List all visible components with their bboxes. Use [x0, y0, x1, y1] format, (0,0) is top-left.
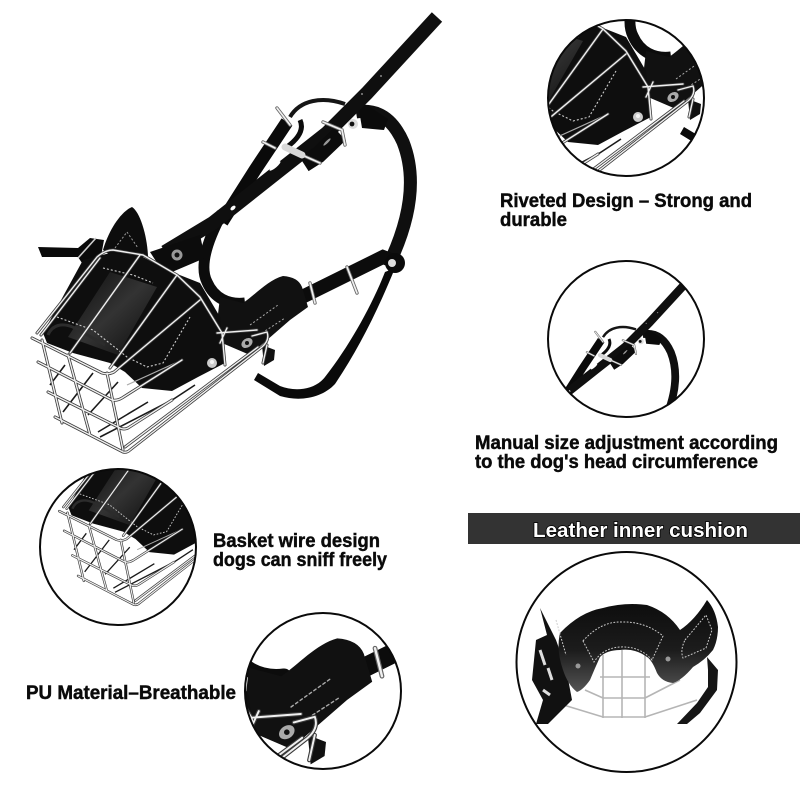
- banner: leather inner cushion: [468, 513, 800, 544]
- cheek piece: [215, 276, 308, 355]
- wire basket: [32, 250, 268, 452]
- strap slits and holes: [230, 75, 382, 211]
- strap rivet: [385, 253, 405, 273]
- muzzle stitching: [57, 268, 190, 367]
- panel: basket wire circle: [39, 468, 197, 626]
- banner: leather inner cushion: Leather inner cushion: [533, 520, 748, 542]
- cheek stitching: [250, 305, 285, 333]
- adjustment ring: [290, 100, 345, 117]
- lower buckle dark edges: [310, 267, 357, 303]
- buckle roller: [285, 147, 302, 155]
- left tail strap: [38, 238, 104, 266]
- strap nub behind hoop: [262, 345, 275, 366]
- text: manual size adjustment: Manual size adjustment according: [475, 433, 778, 454]
- upper buckle dark edges: [263, 108, 345, 163]
- leather nose body: [43, 253, 225, 391]
- text: basket wire design: [213, 531, 387, 571]
- ear flap: [103, 207, 148, 262]
- loop tab: [358, 104, 388, 130]
- text: riveted design: durable: [500, 210, 567, 231]
- panel: riveted detail circle: [547, 19, 705, 177]
- ear stitching: [115, 232, 138, 248]
- top rivet tab: [150, 235, 205, 275]
- nose opening highlight: [48, 325, 105, 345]
- text: manual size adjustment: [475, 433, 778, 473]
- panel: PU material circle: [244, 612, 402, 770]
- thin lower strap: [254, 268, 395, 399]
- panel: leather cushion circle: [516, 552, 736, 772]
- lower buckle metal bars: [310, 267, 357, 303]
- inner strap: [222, 122, 287, 222]
- main top strap: [165, 17, 437, 252]
- back loop strap: [204, 213, 245, 303]
- muzzle upper assembly: [38, 17, 437, 391]
- eyelet: [240, 336, 254, 350]
- flap edge highlight: [127, 360, 182, 385]
- inner buckle frame: [287, 120, 301, 147]
- inner dark wires: [50, 365, 195, 437]
- text: riveted design: Riveted Design – Strong and: [500, 191, 752, 212]
- text: basket wire design: dogs can sniff freely: [213, 550, 387, 571]
- upper buckle metal bars: [263, 108, 345, 163]
- left strap metal parts: [540, 650, 552, 695]
- right strap: [677, 657, 718, 724]
- text: basket wire design: Basket wire design: [213, 531, 380, 552]
- cushion stitching: [556, 615, 712, 662]
- lower strap: [300, 257, 396, 298]
- body rivet: [207, 358, 217, 368]
- strap eyelet: [348, 119, 358, 129]
- text: manual size adjustment: to the dog's head circumference: [475, 452, 758, 473]
- text: riveted design: [500, 191, 752, 231]
- panel: buckle adjustment circle: [547, 260, 705, 418]
- product photo: wire basket muzzle: [32, 17, 437, 452]
- cushion leather: [559, 600, 718, 692]
- tail buckle metal: [78, 238, 96, 258]
- text: PU material: PU Material–Breathable: [26, 683, 236, 704]
- right loop strap: [356, 111, 410, 262]
- wire grid seen from inside: [557, 650, 697, 718]
- cushion rivets: [576, 656, 670, 668]
- leather centre panel: [68, 272, 157, 355]
- doubled strap under buckle: [304, 134, 340, 164]
- left strap cluster: [532, 608, 572, 724]
